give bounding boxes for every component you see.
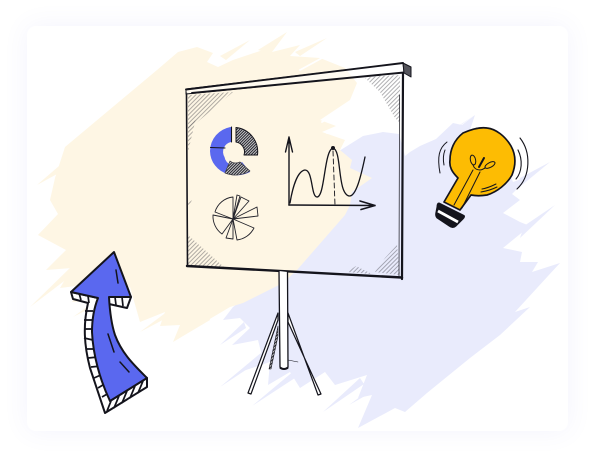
lavender fray streaks bbox=[220, 115, 560, 412]
glow lines right bbox=[516, 138, 528, 189]
screen corner hatching bbox=[188, 75, 400, 275]
hatched rear leg bbox=[269, 326, 278, 369]
bulb screw base bbox=[436, 203, 464, 228]
screen frame bbox=[186, 93, 188, 266]
arrow dashes bbox=[108, 270, 129, 372]
exploded pie chart bbox=[213, 195, 258, 240]
roller cap bbox=[403, 63, 411, 77]
bulb filament bbox=[454, 155, 496, 208]
chart peak marker bbox=[331, 146, 335, 150]
chart axes bbox=[286, 137, 292, 205]
yellow fray streaks bbox=[30, 32, 327, 342]
brush stroke: lavender bbox=[220, 115, 560, 428]
left leg bbox=[248, 313, 278, 394]
arrow front face bbox=[71, 252, 147, 401]
arrow 3D side bbox=[71, 292, 147, 413]
projector screen bbox=[186, 63, 411, 279]
roller bbox=[186, 63, 404, 94]
tripod stand bbox=[248, 271, 321, 395]
bulb glass bbox=[444, 128, 515, 210]
arrow side stripes bbox=[79, 293, 143, 411]
card background bbox=[27, 26, 568, 431]
base white band bbox=[438, 211, 458, 222]
chart dashed guide bbox=[333, 151, 335, 205]
chart curve bbox=[290, 148, 365, 203]
light bulb bbox=[436, 128, 528, 228]
right leg bbox=[288, 313, 321, 395]
donut chart bbox=[210, 127, 258, 175]
centre pole bbox=[279, 271, 288, 369]
glow lines left bbox=[439, 142, 447, 173]
brush stroke: yellow bbox=[30, 32, 372, 342]
line chart bbox=[286, 137, 375, 210]
bulb highlight bbox=[481, 184, 497, 192]
blue arrow bbox=[71, 252, 147, 413]
